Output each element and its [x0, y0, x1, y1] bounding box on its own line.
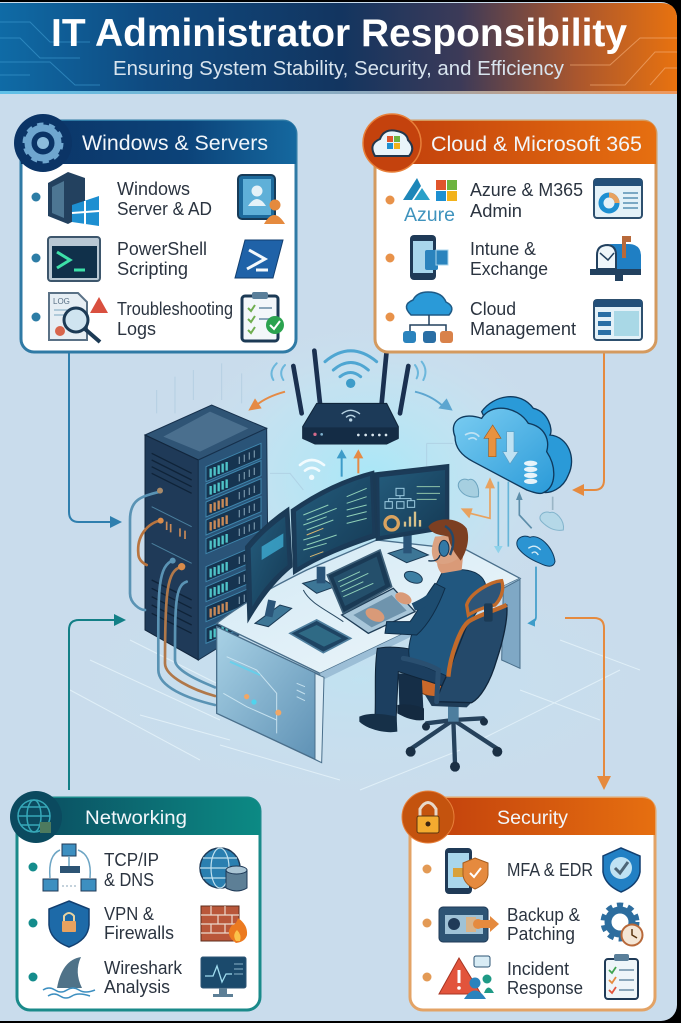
wifi signals	[271, 351, 425, 480]
title: IT Administrator Responsibility	[51, 12, 627, 55]
icon: Azure and Microsoft logos	[403, 178, 457, 226]
bullets	[32, 192, 40, 322]
icon: alert with team	[439, 956, 494, 999]
bullets	[386, 196, 394, 322]
icon: response checklist	[605, 954, 638, 999]
small clouds	[458, 479, 564, 566]
icon: phone with Intune	[410, 235, 448, 280]
text: Azure & M365 Admin: Admin	[470, 201, 522, 221]
text: VPN & Firewalls	[104, 904, 174, 943]
icon: cloud hierarchy	[403, 292, 453, 343]
icon: monitor graph	[201, 957, 246, 997]
text: TCP/IP & DNS	[104, 850, 159, 890]
icon: globe with database	[200, 848, 247, 891]
text: Azure & M365 Admin: Azure & M365	[470, 180, 583, 200]
arrow: desk to Security panel	[565, 618, 611, 790]
heading: Cloud & Microsoft 365: Cloud & Microsoft 365	[431, 133, 642, 156]
icon: backup tape	[439, 907, 499, 942]
faint data lines	[157, 363, 453, 490]
bullets	[422, 864, 432, 982]
arm	[385, 583, 445, 635]
text: Intune & Exchange: Intune &	[470, 239, 536, 259]
right monitor	[375, 465, 448, 563]
text: Troubleshooting Logs	[117, 299, 233, 339]
floor glow	[20, 320, 681, 820]
text: Wireshark Analysis: Analysis	[104, 977, 170, 997]
text: VPN & Firewalls: VPN &	[104, 904, 154, 924]
icon: gear with clock	[603, 905, 642, 946]
data flow arrows near cloud	[461, 477, 553, 627]
text: Incident Response: Incident	[507, 959, 569, 979]
icon: address book	[238, 175, 285, 224]
neck and head	[428, 519, 468, 573]
header bar: Windows & Servers	[21, 121, 296, 164]
header bar: Cloud & Microsoft 365	[375, 121, 656, 164]
router	[293, 351, 408, 444]
middle monitor	[292, 472, 377, 593]
torso	[409, 570, 486, 677]
icon: checklist clipboard	[242, 292, 284, 341]
text: TCP/IP & DNS: TCP/IP	[104, 850, 159, 870]
panel: Networking	[10, 791, 260, 1010]
laptop	[303, 550, 415, 633]
text: PowerShell Scripting	[117, 239, 207, 279]
text: Troubleshooting Logs: Logs	[117, 319, 156, 339]
panel: Security	[402, 791, 655, 1010]
panel: Cloud & Microsoft 365	[363, 114, 656, 352]
text: Cloud Management: Cloud	[470, 299, 516, 319]
heading: Networking: Networking	[85, 808, 187, 829]
heading: Security: Security	[497, 808, 569, 829]
text: Incident Response	[507, 959, 583, 998]
text: Wireshark Analysis	[104, 958, 183, 997]
text: Incident Response: Response	[507, 978, 583, 998]
chair base and seat	[402, 677, 502, 772]
text: Cloud Management	[470, 299, 576, 339]
hands	[363, 590, 413, 625]
bullets	[28, 862, 38, 982]
IT administrator figure	[359, 519, 486, 732]
mouse	[403, 569, 424, 586]
header banner	[0, 3, 677, 94]
icon: globe	[10, 791, 62, 843]
text: MFA & EDR: MFA & EDR	[507, 860, 593, 880]
text: Backup & Patching	[507, 905, 580, 944]
icon: network topology	[43, 844, 96, 891]
icon: dashboard window	[594, 179, 642, 218]
subtitle: Ensuring System Stability, Security, and Efficiency	[113, 58, 564, 80]
text: PowerShell Scripting: Scripting	[117, 259, 188, 279]
text: Backup & Patching: Backup &	[507, 905, 580, 925]
text: PowerShell Scripting: PowerShell	[117, 239, 207, 259]
arrow: Windows panel to server	[69, 352, 122, 528]
icon: mailbox	[590, 236, 641, 281]
text: Windows Server & AD: Windows	[117, 179, 190, 199]
left monitor	[246, 508, 292, 627]
text: Backup & Patching: Patching	[507, 924, 575, 944]
text: Intune & Exchange	[470, 239, 548, 279]
text: Windows Server & AD: Server & AD	[117, 199, 212, 219]
text: Wireshark Analysis: Wireshark	[104, 958, 183, 978]
icon: server tower	[48, 172, 99, 226]
icon: padlock	[402, 791, 454, 843]
text: Troubleshooting Logs: Troubleshooting	[117, 299, 233, 319]
arrow: Cloud panel to cloud	[572, 352, 604, 496]
flow arrows around router	[248, 392, 453, 477]
header bar: Security	[410, 798, 655, 835]
icon: management console	[594, 300, 642, 340]
icon: shark fin	[43, 957, 95, 998]
icon: firewall	[201, 906, 247, 943]
icon: PowerShell logo	[235, 240, 283, 278]
legs and shoes	[359, 647, 448, 732]
tablet	[290, 620, 351, 653]
icon: terminal	[48, 237, 100, 281]
arrow: Networking panel to server	[69, 614, 126, 790]
text: Intune & Exchange: Exchange	[470, 259, 548, 279]
icon: shield with lock	[49, 901, 89, 947]
text: TCP/IP & DNS: & DNS	[104, 870, 154, 890]
panel: Windows & Servers	[14, 114, 296, 352]
header bar: Networking	[17, 798, 260, 835]
text: Windows Server & AD	[117, 179, 212, 219]
icon: gear	[14, 114, 72, 172]
icon: log search with warning: LOG	[53, 297, 70, 306]
icon: log search with warning	[49, 293, 108, 342]
desk	[217, 540, 520, 763]
server rack	[145, 405, 268, 660]
text: Azure & M365 Admin	[470, 180, 583, 221]
network cables	[130, 488, 215, 705]
icon: cloud with Microsoft squares	[363, 114, 421, 172]
central illustration	[130, 351, 572, 772]
icon: Azure and Microsoft logos: Azure	[404, 205, 455, 226]
chair backrest and armrest	[403, 581, 507, 703]
large cloud	[453, 397, 572, 493]
icon: phone with shield	[445, 848, 488, 894]
heading: Windows & Servers: Windows & Servers	[82, 132, 268, 155]
text: VPN & Firewalls: Firewalls	[104, 923, 174, 943]
text: Cloud Management: Management	[470, 319, 576, 339]
icon: shield check	[603, 848, 640, 892]
